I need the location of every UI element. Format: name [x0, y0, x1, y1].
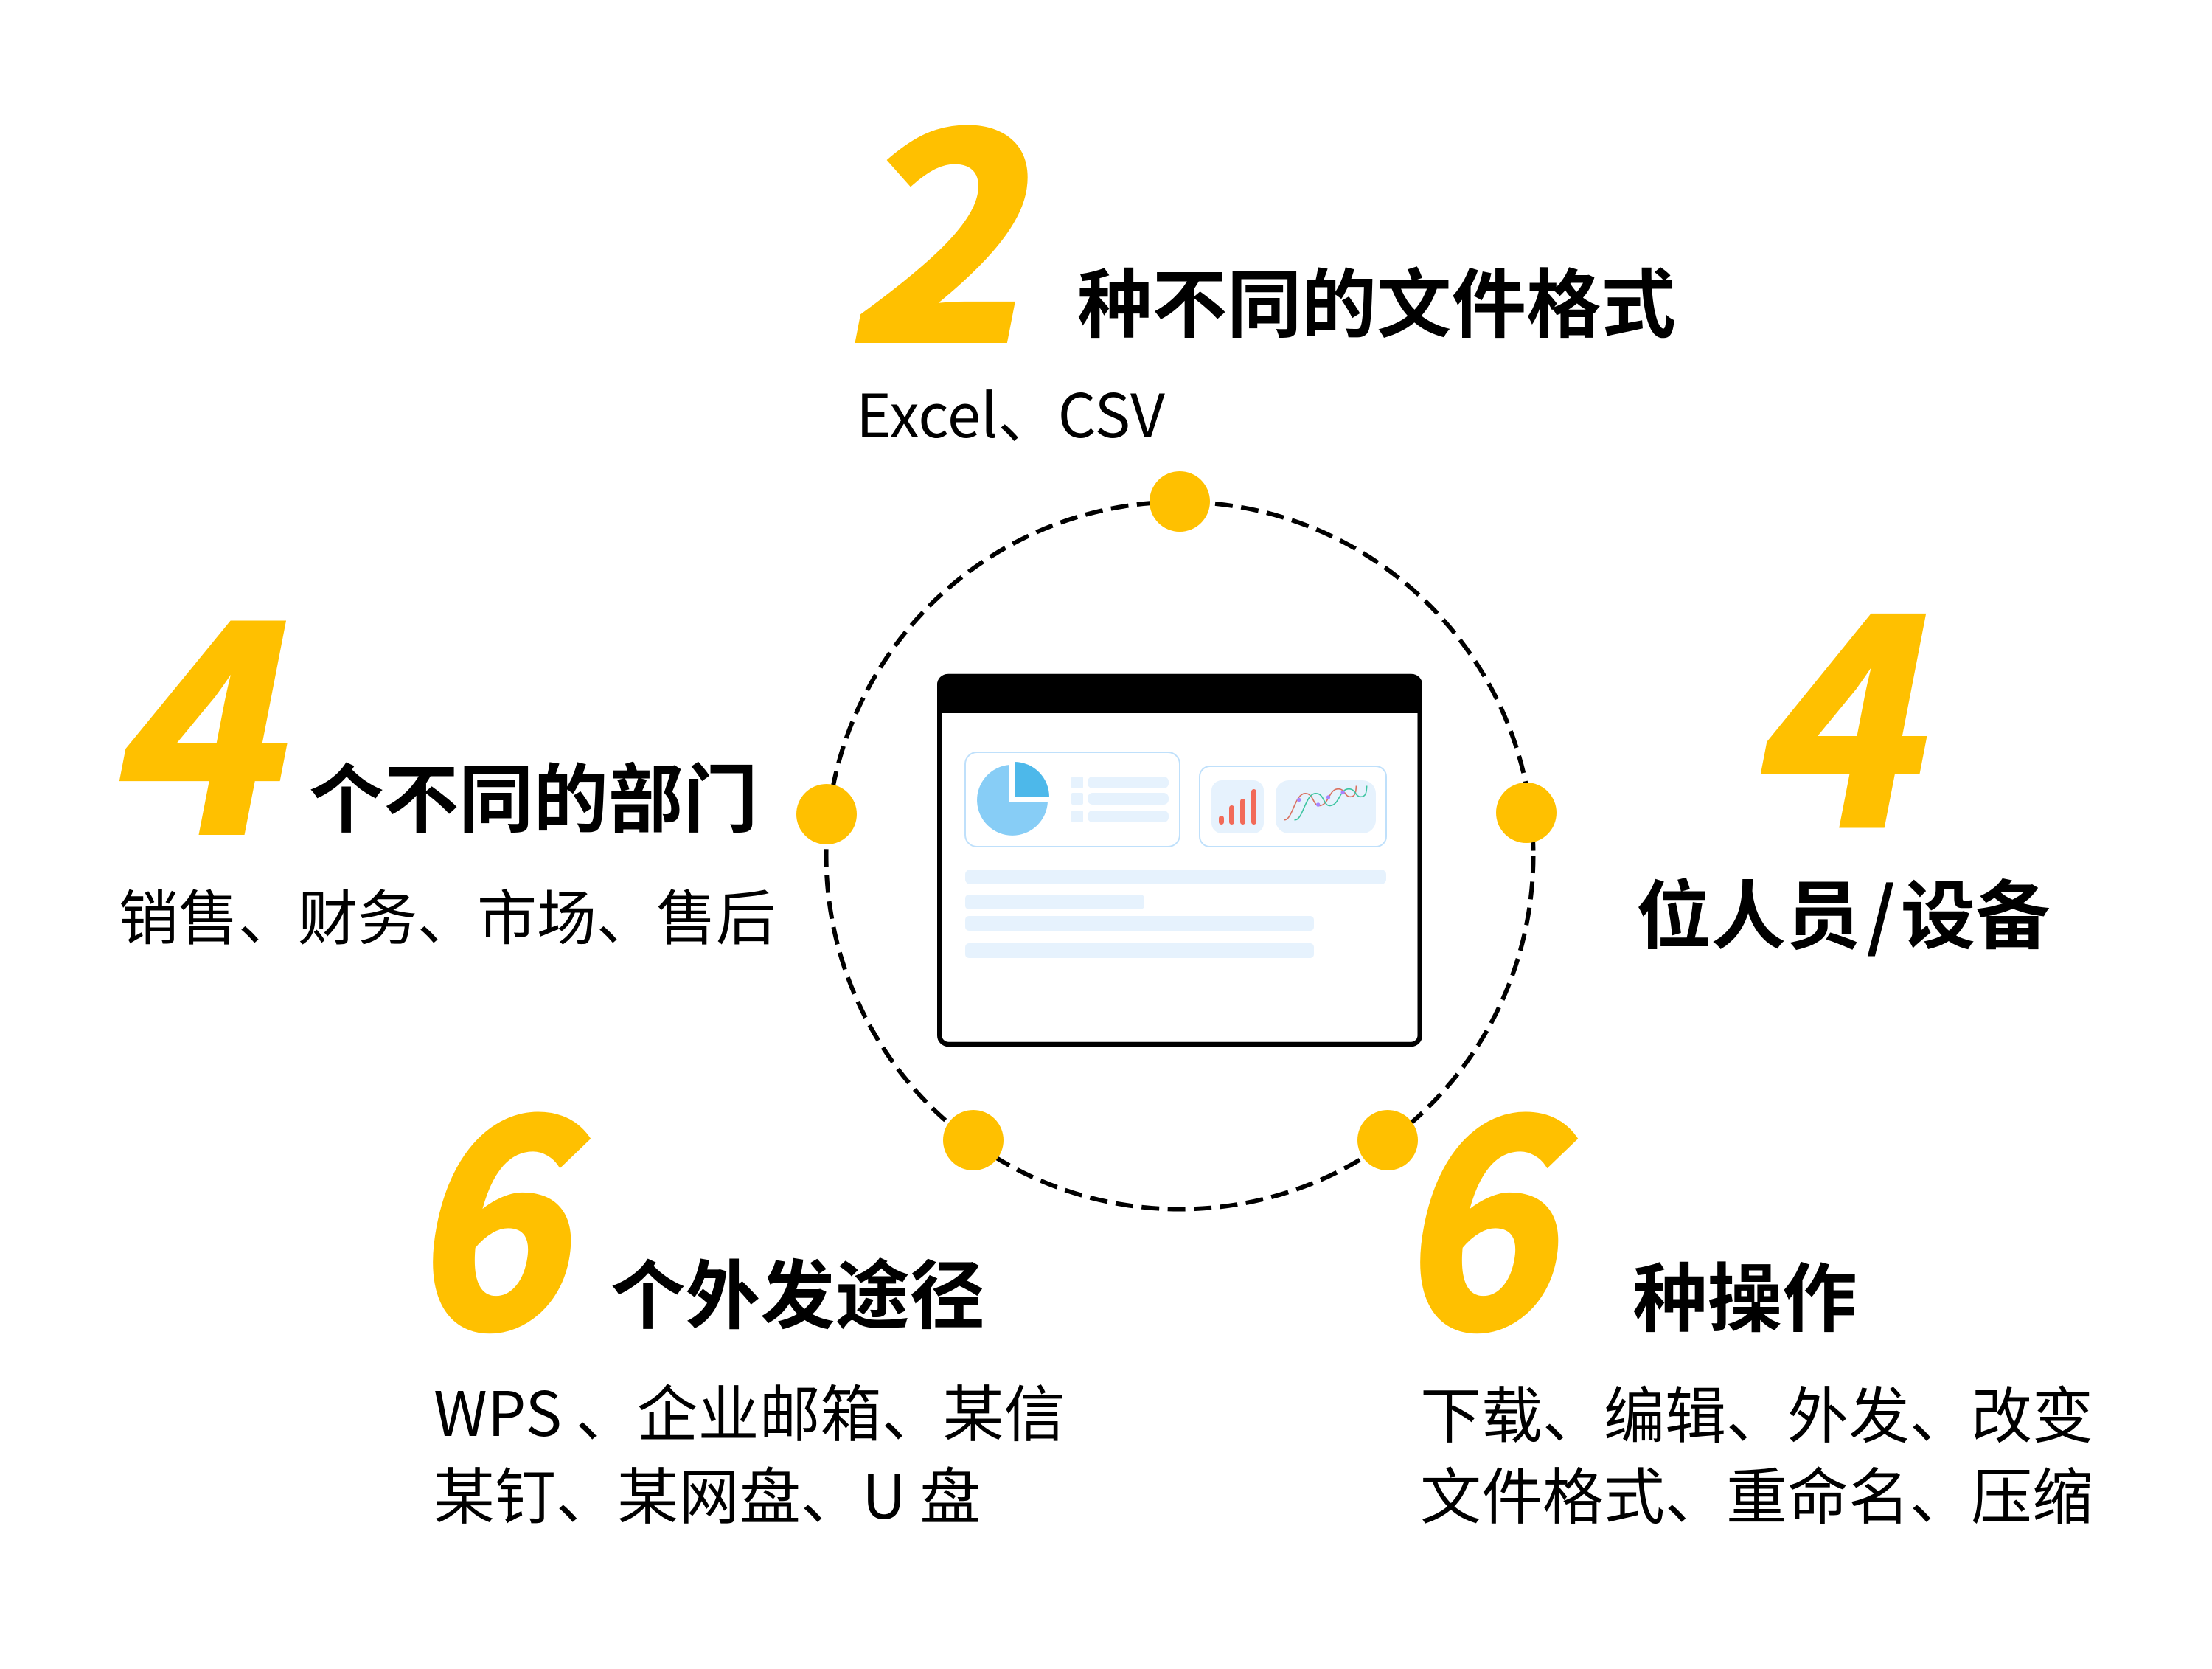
- number 4: 4: [91, 507, 338, 913]
- detail: 某钉、某网盘、U 盘: [434, 1448, 981, 1536]
- bar chart: [1219, 789, 1256, 825]
- block: 6 operations: [1379, 1002, 2093, 1536]
- block: 6 channels: [392, 1002, 1065, 1536]
- dashboard window illustration: [937, 674, 1422, 1044]
- heading: 位人员/设备: [1636, 856, 2051, 965]
- detail: 文件格式、重命名、压缩: [1420, 1448, 2093, 1536]
- heading: 个外发途径: [611, 1236, 985, 1344]
- window body: [939, 676, 1420, 1044]
- pie chart: [977, 762, 1049, 836]
- placeholder text rows: [965, 870, 1386, 958]
- pie legend: [1071, 777, 1169, 822]
- detail: [1420, 1367, 2093, 1536]
- line chart: [1284, 786, 1367, 820]
- number 6: 6: [392, 1002, 627, 1407]
- block: 4 departments: [91, 507, 776, 957]
- ring nodes: [796, 471, 1557, 1170]
- heading: 种操作: [1632, 1239, 1857, 1347]
- detail: 下载、编辑、外发、改变: [1420, 1367, 2093, 1455]
- detail: 销售、财务、市场、售后: [119, 871, 776, 957]
- block: 2 formats: [831, 15, 1676, 455]
- dashed orbit ring: [826, 502, 1534, 1210]
- block: 4 people: [1636, 499, 2051, 965]
- heading: 个不同的部门: [309, 740, 758, 848]
- number 6: 6: [1379, 1002, 1615, 1407]
- charts card: [1200, 766, 1386, 847]
- detail: [434, 1365, 1065, 1536]
- detail: Excel、CSV: [856, 368, 1165, 455]
- window title bar: [937, 674, 1422, 713]
- pie chart card: [965, 752, 1180, 847]
- number 4: 4: [1733, 499, 1978, 906]
- heading: 种不同的文件格式: [1077, 245, 1676, 353]
- detail: WPS 、企业邮箱、某信: [434, 1365, 1065, 1454]
- number 2: 2: [831, 15, 1082, 420]
